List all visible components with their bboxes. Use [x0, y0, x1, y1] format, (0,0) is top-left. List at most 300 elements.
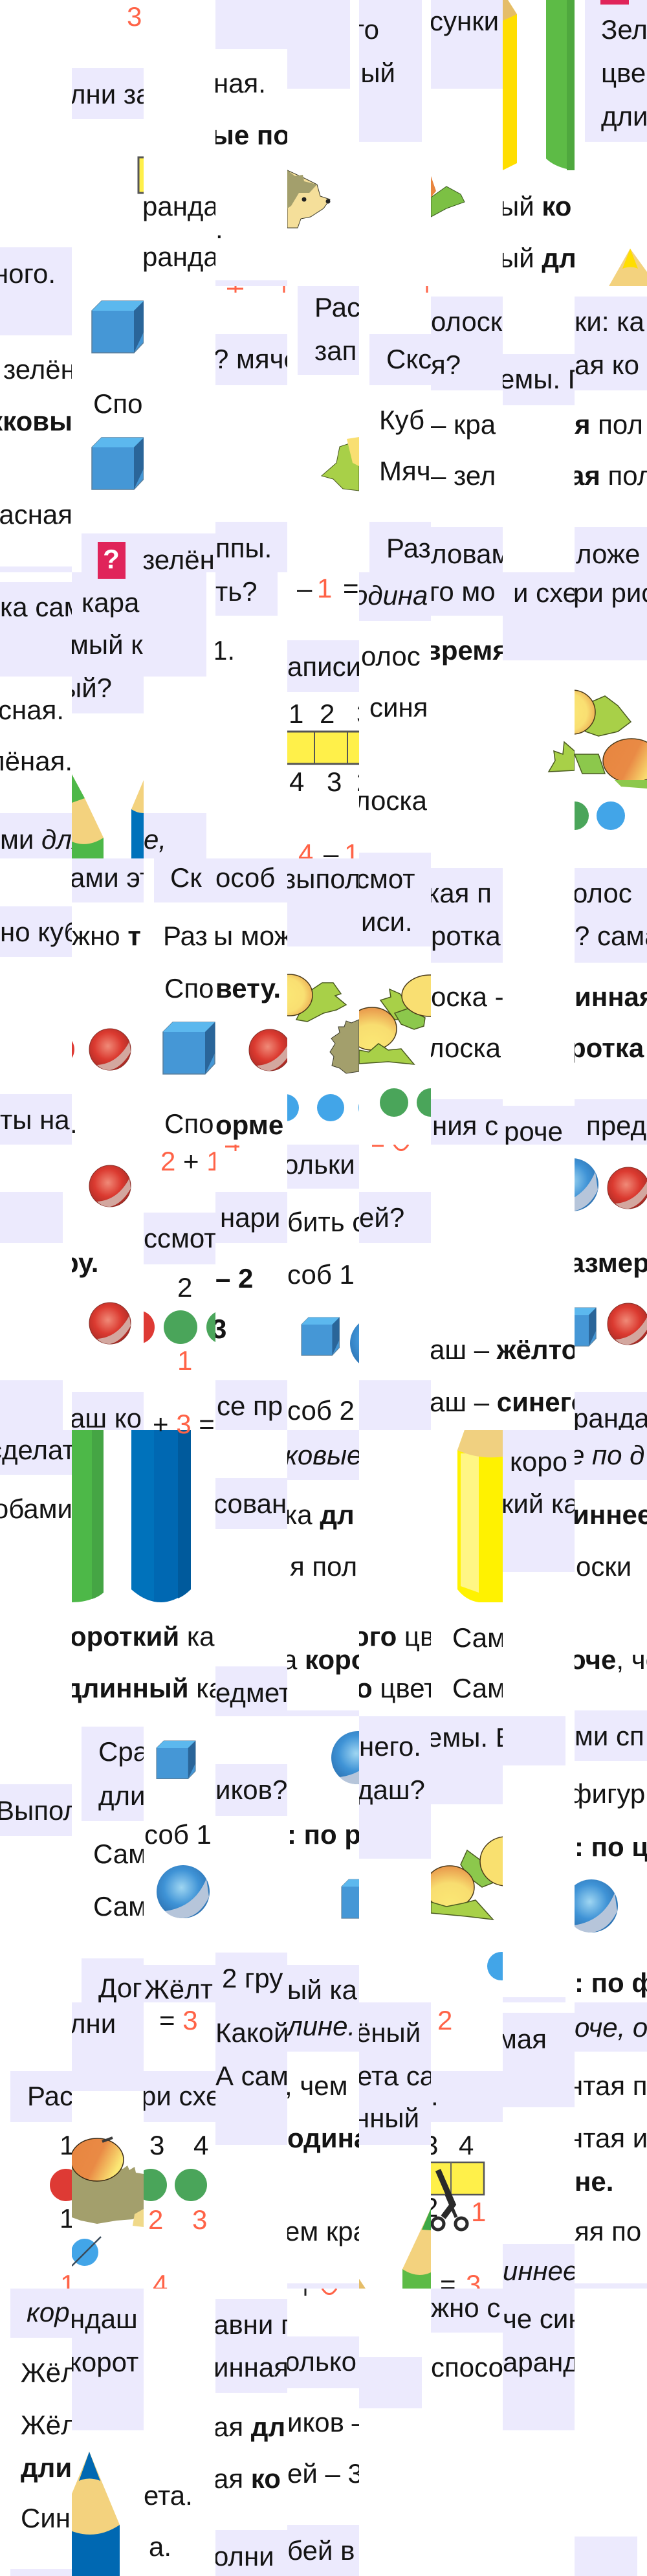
- panel: tile column 8 row 7: оче, о: [575, 2012, 647, 2043]
- panel: tile column 4 row 8: ей – 3: [287, 2458, 363, 2489]
- icon: blue dot crossed: [71, 2237, 101, 2266]
- panel: tile column 0 row 8: [10, 2289, 77, 2576]
- panel: tile column 3 row 7: Какой: [215, 2017, 289, 2048]
- panel: tile column 3 row 4: 3: [212, 1314, 226, 1344]
- panel: tile column 3 row 0: ная.: [214, 68, 266, 98]
- panel: tile column 5 row 3 with fruit: смот: [356, 864, 415, 894]
- panel: tile column 5 row 5: о цвет: [356, 1673, 436, 1703]
- panel: tile column 4 row 2: –: [324, 838, 339, 869]
- panel: tile column 7 row 6: [503, 1716, 565, 2002]
- panel: tile column 4 row 4: соб 2: [287, 1395, 355, 1426]
- panel: tile column 1 row 0: 3: [127, 1, 142, 32]
- panel: tile column 7 row 8: че син: [503, 2303, 584, 2334]
- icon: yellow pencil body: [457, 1430, 503, 1602]
- panel: tile column 5 row 0: [340, 0, 422, 142]
- panel: tile column 8 row 3: олос: [573, 878, 632, 908]
- panel: tile column 6 row 1: – кра: [431, 409, 496, 440]
- panel: tile column 8 row 4: [545, 1158, 647, 1433]
- panel: tile column 5 row 6: него.: [359, 1731, 421, 1762]
- icon: apples with leaves: [347, 975, 459, 1064]
- panel: tile column 5 row 3 with fruit: [347, 858, 459, 1117]
- panel: tile column 2 row 0: ранда: [142, 241, 219, 272]
- panel: tile column 0 row 8: кор: [27, 2297, 70, 2327]
- panel: tile column 4 row 2: 2: [320, 699, 334, 729]
- panel: tile column 0 row 8: дли: [21, 2452, 72, 2483]
- panel: tile column 4 row 2: 1: [344, 838, 359, 869]
- panel: tile column 0 row 0: [0, 247, 72, 289]
- panel: tile column 1 row 2: [62, 572, 144, 858]
- panel: tile column 4 row 5: а коро: [282, 1644, 367, 1675]
- icon: hedgehog body: [330, 1020, 359, 1073]
- panel: tile column 2 row 3: Раз: [163, 921, 208, 951]
- panel: tile column 5 row 1: Куб: [379, 405, 424, 435]
- panel: tile column 5 row 7 with green pencil tip: [355, 2002, 435, 2289]
- panel: tile column 4 row 2: 4: [298, 838, 313, 869]
- panel: tile column 1 row 4: ру.: [62, 1248, 98, 1278]
- panel: tile column 8 row 1: [569, 297, 647, 572]
- panel: tile column 4 row 5: ковые: [285, 1440, 362, 1470]
- panel: tile column 8 row 0: Зел: [601, 14, 647, 45]
- panel: tile column 2 row 4: ссмот: [144, 1223, 217, 1253]
- panel: tile column 0 row 3: но куб: [0, 917, 80, 947]
- panel: tile column 2 row 3: [154, 858, 215, 1139]
- panel: tile column 0 row 2: ка сам: [0, 592, 83, 622]
- panel: tile column 2 row 7: 4: [193, 2130, 208, 2160]
- panel: tile column 1 row 6: Сам: [93, 1891, 147, 1921]
- panel: tile column 4 row 0 with hedgehog head: [287, 0, 350, 228]
- panel: tile column 3 row 5: сован: [214, 1488, 287, 1519]
- panel: tile column 6 row 5 with yellow pencil: Сам: [452, 1622, 506, 1653]
- panel: tile column 6 row 3: [427, 868, 504, 1145]
- icon: blue ball: [331, 1731, 384, 1784]
- panel: tile column 6 row 7 with strip and scissors: 3: [466, 2269, 481, 2300]
- panel: tile column 4 row 6: ый ка: [287, 1975, 358, 2005]
- panel: tile column 6 row 3: оска -: [431, 981, 504, 1012]
- panel: tile column 4 row 8: иков –: [287, 2407, 367, 2437]
- panel: tile column 0 row 7: 1: [60, 2130, 74, 2160]
- panel: tile column 6 row 8: жно с: [431, 2292, 500, 2323]
- panel: tile column 4 row 3 with fruit and dots: зыпол: [283, 864, 360, 894]
- panel: tiles columns 6-7 row 4: аш – жёлто: [430, 1334, 578, 1365]
- panel: tile column 2 row 3: Спо: [164, 1108, 214, 1139]
- panel: tile column 8 row 7: [568, 2002, 647, 2289]
- panel: tile column 2 row 3: Ск: [170, 862, 202, 893]
- icon: leaf: [431, 186, 465, 217]
- panel: tile column 8 row 7: не.: [575, 2166, 613, 2197]
- panel: tile column 5 row 2: лоска: [355, 785, 428, 816]
- panel: tile column 1 row 1: [82, 300, 144, 574]
- panel: tile column 0 row 1: зелён: [3, 354, 76, 385]
- panel: tile column 1 row 8 with blue pencil: [69, 2289, 144, 2576]
- icon: cube: [157, 1741, 195, 1778]
- panel: tile column 3 row 5: едмет: [215, 1677, 291, 1708]
- panel: tile column 6 row 2: время: [424, 635, 509, 666]
- panel: tile column 7 row 7: мая: [498, 2024, 547, 2054]
- panel: tile column 2 row 8: [144, 2480, 193, 2562]
- icon: yellow pencil body: [503, 0, 517, 170]
- icon: cube: [92, 301, 144, 353]
- icon: green pencil body: [546, 0, 575, 170]
- icon: yellow numbered strip: [285, 732, 362, 764]
- panel: tile column 6 row 6 with apples: [425, 1716, 532, 1980]
- panel: tile column 2 row 6: [144, 1740, 215, 2004]
- panel: tile column 0 row 8: Жёл: [21, 2410, 77, 2440]
- panel: tile column 3 row 2: [212, 572, 278, 666]
- panel: tile column 4 row 2: 3: [356, 699, 371, 729]
- panel: tile column 7 row 1: емы. Г: [499, 364, 583, 394]
- panel: tile column 8 row 8: [575, 2537, 637, 2576]
- panel: tile column 6 row 1: – зел: [431, 460, 496, 491]
- panel: tile column 4 row 2: 4: [289, 767, 304, 797]
- panel: tile column 2 row 2: [144, 572, 206, 858]
- panel: tile column 4 row 5: я пол: [290, 1551, 357, 1582]
- panel: tile column 8 row 3: ротка: [569, 1033, 644, 1063]
- panel: tile column 3 row 6: [215, 1764, 287, 2002]
- panel: tile column 7 row 5: кий ка: [501, 1488, 579, 1519]
- panel: tile column 2 row 2: е,: [144, 824, 166, 855]
- panel: tile column 8 row 6: фигур: [569, 1778, 645, 1809]
- panel: tile column 3 row 8: инная: [214, 2352, 289, 2382]
- panel: tile column 6 row 1: я?: [431, 350, 461, 380]
- panel: tile column 7 row 8: аранд: [503, 2347, 579, 2377]
- icon: blue pencil tip: [59, 2452, 120, 2576]
- panel: tile column 4 row 2: –: [297, 573, 313, 603]
- panel: tile column 0 row 6: [0, 1784, 79, 1836]
- panel: tile column 3 row 4: се пр: [217, 1391, 283, 1421]
- panel: tile column 6 row 7 with strip and scissors: =: [440, 2269, 456, 2300]
- panel: tile column 7 row 3: роче: [504, 1116, 563, 1147]
- panel: tile column 8 row 0: дли: [601, 101, 647, 131]
- icon: green pencil tip: [359, 2208, 431, 2289]
- panel: tile column 3 row 1: [214, 286, 299, 572]
- panel: tile column 8 row 1: я пол: [574, 409, 643, 440]
- panel: tile column 3 row 8: ая ко: [214, 2463, 281, 2494]
- panel: tile column 1 row 7 with hedgehog: лни: [70, 2008, 116, 2039]
- panel: tile column 8 row 5: е по д: [569, 1440, 644, 1470]
- panel: tile column 5 row 1: Раз: [386, 533, 431, 563]
- panel: tile column 0 row 7: Рас: [27, 2081, 73, 2111]
- panel: tile column 1 row 6: Дог: [98, 1973, 142, 2003]
- panel: tile column 4 row 7: , чем: [285, 2070, 347, 2101]
- panel: tile column 2 row 4: 2 + 1: [160, 1146, 222, 1176]
- panel: tile column 1 row 3: жно т: [72, 921, 141, 951]
- panel: tile column 0 row 7: 1: [60, 2203, 74, 2234]
- panel: tile column 5 row 7 with green pencil tip: ёный: [356, 2017, 421, 2048]
- panel: tile column 3 row 4: [212, 1145, 287, 1430]
- icon: apples with leaves: [425, 1837, 532, 1920]
- panel: tile column 2 row 7: = 3: [159, 2005, 198, 2035]
- panel: tile column 6 row 8: [431, 2289, 503, 2382]
- panel: tile column 4 row 5: [282, 1430, 367, 1716]
- panel: tile column 6 row 5 with yellow pencil: [452, 1430, 506, 1703]
- panel: tile column 5 row 2: олос: [361, 641, 421, 671]
- panel: tile column 6 row 3: ротка: [431, 921, 501, 951]
- panel: tile column 2 row 7: 3: [149, 2130, 164, 2160]
- panel: tile column 5 row 1: Мяч: [379, 456, 431, 486]
- panel: tile column 6 row 3: ния с: [432, 1110, 498, 1141]
- icon: scissors: [432, 2170, 467, 2230]
- panel: tile column 1 row 2: ый?: [62, 673, 112, 703]
- panel: tile column 0 row 3: ты на: [0, 1104, 70, 1135]
- panel: tile column 7 row 3: [503, 1106, 575, 1147]
- panel: tile column 3 row 7: А сам: [215, 2061, 289, 2091]
- icon: green pencil body: [72, 1430, 104, 1602]
- icon: yellow pencil tip: [609, 249, 647, 286]
- panel: tile column 2 row 0: [142, 191, 219, 272]
- panel: tile column 5 row 8: [359, 2357, 422, 2408]
- panel: tile column 6 row 7 with strip and scissors: 2: [437, 2005, 452, 2035]
- panel: tile column 1 row 7 with hedgehog: [70, 2002, 144, 2267]
- panel: tile column 1 row 4: [62, 1165, 144, 1433]
- panel: tile column 4 row 2: 2: [356, 767, 371, 797]
- panel: tile column 4 row 2: [287, 573, 371, 869]
- panel: tile column 8 row 7: нтая и: [568, 2123, 647, 2153]
- icon: hedgehog head: [287, 170, 330, 228]
- panel: tile column 3 row 8: олни: [214, 2541, 274, 2571]
- panel: tile column 5 row 7 with green pencil tip: нный: [355, 2103, 419, 2133]
- panel: tiles columns 1-2 row 5 with pencils: ороткий ка: [70, 1621, 215, 1652]
- panel: tile column 4 row 2: 1: [317, 573, 332, 603]
- panel: tile column 0 row 7: 1: [60, 2269, 75, 2300]
- panel: tile column 8 row 1: ая ко: [575, 350, 639, 380]
- panel: tiles columns 1-2 row 5 with pencils: [65, 1409, 225, 1703]
- panel: tile column 7 row 2: и схе: [513, 577, 578, 608]
- panel: tile column 2 row 6: соб 1: [144, 1819, 212, 1850]
- icon: cube: [558, 1308, 596, 1346]
- panel: tile column 2 row 6: Жёлт: [144, 1974, 213, 2004]
- panel: tile column 6 row 2: го мо: [430, 576, 496, 607]
- panel: tile column 0 row 1: [0, 286, 76, 572]
- panel: tile column 2 row 7: 3: [192, 2204, 207, 2235]
- panel: tile column 4 row 3 with fruit and dots: [283, 858, 360, 1121]
- panel: tile column 2 row 4: + 3 =: [153, 1409, 215, 1439]
- panel: tile column 6 row 7 with strip and scissors: 2: [423, 2192, 438, 2223]
- panel: tile column 8 row 3: [569, 868, 647, 1145]
- panel: tile column 5 row 2: одина: [353, 580, 428, 610]
- panel: tile column 1 row 8 with blue pencil: ндаш: [70, 2303, 138, 2334]
- panel: tile column 3 row 3: [214, 858, 292, 1140]
- panel: tile column 3 row 3: особ: [215, 862, 275, 893]
- panel: tile column 2 row 4: 2: [177, 1272, 192, 1303]
- panel: tile column 4 row 4: соб 1: [287, 1259, 355, 1290]
- panel: tile column 2 row 7: 2: [148, 2204, 163, 2235]
- panel: tile column 2 row 7: ри схе: [141, 2081, 221, 2111]
- panel: tile column 4 row 2: 1: [289, 699, 303, 729]
- panel: tile column 7 row 5: коро: [510, 1446, 567, 1477]
- panel: tile column 1 row 6: Сра: [98, 1736, 149, 1767]
- panel: tile column 1 row 1: ?: [103, 544, 120, 574]
- panel: tile column 4 row 4: [283, 1145, 366, 1426]
- panel: tiles columns 6-7 row 4: аш – синего: [430, 1387, 587, 1417]
- panel: tile column 6 row 1: [431, 297, 510, 572]
- panel: tile column 6 row 6 with apples: емы. В: [427, 1722, 514, 1753]
- icon: apples with leaves: [550, 690, 647, 789]
- panel: tile column 3 row 6: иков?: [215, 1775, 287, 1805]
- panel: tile column 3 row 0: ые по: [211, 120, 290, 150]
- panel: tile column 4 row 1: Рас: [314, 292, 360, 322]
- panel: tile column 1 row 3: [70, 858, 152, 1139]
- panel: tile column 5 row 1: Скс: [386, 344, 432, 374]
- panel: tile column 6 row 7 with strip and scissors: 1: [471, 2197, 486, 2227]
- panel: tile column 1 row 1: Спо: [93, 388, 142, 419]
- panel: tile column 5 row 2: синя: [369, 692, 428, 722]
- icon: red ball: [608, 1167, 647, 1209]
- panel: tile column 3 row 2: ть?: [215, 576, 257, 607]
- panel: tile column 0 row 4: [0, 1192, 63, 1430]
- panel: tile column 2 row 7: [141, 2005, 221, 2300]
- icon: cube: [302, 1317, 339, 1355]
- panel: tile column 8 row 2 with apples: [550, 572, 647, 830]
- panel: tile column 6 row 0: сунки: [430, 6, 499, 36]
- panel: tile column 4 row 7: лине.: [285, 2011, 355, 2041]
- panel: tile column 8 row 0: [585, 0, 647, 286]
- panel: tile column 7 row 0 with pencils: ый ко: [499, 191, 571, 221]
- panel: tile column 7 row 2: [503, 572, 578, 772]
- panel: tile column 3 row 3: вету.: [215, 973, 281, 1003]
- icon: red ball: [249, 1029, 291, 1071]
- panel: tile column 6 row 3: кая п: [427, 878, 492, 908]
- icon: blue ball: [545, 1158, 598, 1211]
- panel: tile column 2 row 1: зелён: [142, 544, 215, 575]
- icon: red ball: [608, 1303, 647, 1345]
- panel: tile column 4 row 8: олько: [285, 2346, 356, 2377]
- panel: tile column 2 row 8: а.: [149, 2531, 171, 2562]
- panel: tile column 6 row 2: [424, 572, 509, 666]
- panel: tile column 0 row 5: [0, 1430, 75, 1524]
- panel: tile column 6 row 1: ловам: [431, 539, 510, 569]
- panel: tile column 3 row 3: орме: [215, 1110, 283, 1140]
- panel: tile column 2 row 4: [144, 1146, 222, 1439]
- panel: tile column 0 row 2: сная.: [0, 695, 64, 725]
- panel: tile column 4 row 8: бей в: [287, 2535, 355, 2566]
- panel: tile column 3 row 4: – 2: [215, 1263, 253, 1294]
- panel: tile column 7 row 0 with pencils: ый дл: [499, 243, 576, 273]
- panel: tile column 5 row 5: [353, 1621, 436, 1703]
- icon: cube: [163, 1022, 215, 1074]
- panel: tiles columns 1-2 row 5 with pencils: длинный ка: [65, 1673, 225, 1703]
- panel: tile column 4 row 6: [287, 1731, 384, 2005]
- panel: tile column 8 row 7: яя по: [575, 2216, 641, 2246]
- panel: tile column 7 row 5: [501, 1430, 579, 1572]
- panel: tile column 5 row 4: [359, 1145, 431, 1430]
- icon: blue ball: [350, 1317, 403, 1370]
- panel: tile column 3 row 8: ая дл: [214, 2412, 285, 2442]
- panel: tile column 5 row 0: ый: [360, 58, 395, 88]
- panel: tile column 3 row 6: 2 гру: [222, 1963, 283, 1993]
- panel: tile column 8 row 6: [565, 1716, 647, 1998]
- panel: tile column 7 row 8: [503, 2289, 584, 2430]
- panel: tile column 8 row 1: ки: ка: [575, 306, 644, 337]
- panel: tile column 5 row 6: [357, 1716, 451, 1859]
- panel: tile column 4 row 2: аписи: [287, 651, 361, 682]
- panel: tile column 3 row 5: [214, 1478, 291, 1716]
- icon: blue ball: [565, 1879, 618, 1932]
- panel: tile column 1 row 3: ами эт: [70, 862, 152, 893]
- panel: tile column 6 row 3: лоска: [428, 1033, 501, 1063]
- panel: tile column 5 row 3 with fruit: иси.: [361, 906, 413, 937]
- panel: tile column 0 row 8: Син: [21, 2503, 71, 2533]
- panel: tile column 7 row 7: [498, 2013, 578, 2289]
- panel: tile column 8 row 7: нтая п: [568, 2070, 647, 2101]
- panel: tile column 5 row 2: [353, 572, 431, 858]
- panel: tile column 3 row 2: 1.: [212, 635, 235, 666]
- panel: tile column 8 row 6: ми сп: [575, 1721, 644, 1751]
- panel: tile column 3 row 7: [215, 2002, 289, 2145]
- panel: tile column 0 row 2: ми для: [0, 824, 86, 855]
- panel: tile column 4 row 7: одина: [287, 2123, 369, 2153]
- panel: tile column 6 row 1: олоск: [431, 306, 503, 337]
- panel: tile column 2 row 4: 1: [177, 1345, 192, 1376]
- panel: tiles columns 1-2 row 5 with pencils: + 3 =: [153, 1409, 215, 1439]
- icon: leaf: [549, 742, 575, 772]
- panel: tile column 7 row 7: иннее: [503, 2256, 578, 2286]
- panel: tile column 6 row 7 with strip and scissors: 3: [423, 2130, 438, 2160]
- panel: tile column 1 row 4: аш ко: [70, 1403, 142, 1433]
- panel: tile column 6 row 0: [430, 0, 503, 217]
- icon: blue ball: [157, 1865, 210, 1918]
- panel: tile column 2 row 7: 4: [153, 2269, 168, 2300]
- panel: tile column 5 row 7 with green pencil tip: ета са: [357, 2061, 435, 2091]
- panel: tile column 6 row 7 with strip and scissors: [423, 2005, 503, 2300]
- panel: tile column 3 row 0: .: [215, 214, 223, 244]
- panel: tile column 8 row 6: : по ц: [575, 1831, 647, 1862]
- icon: yellow apple with leaf: [266, 974, 346, 1022]
- panel: tile column 5 row 4: ей?: [359, 1202, 404, 1233]
- panel: tile column 3 row 8: авни г: [214, 2309, 291, 2340]
- panel: tile column 3 row 1: ? мяче: [214, 344, 299, 374]
- panel: tile column 7 row 0 with pencils: [499, 0, 576, 273]
- panel: tile column 6 row 8: спосо: [431, 2352, 503, 2382]
- panel: tile column 5 row 0: ого: [340, 14, 379, 45]
- panel: tile column 1 row 6: [82, 1727, 149, 2003]
- panel: tile column 4 row 7: [285, 2002, 369, 2289]
- panel: tile column 0 row 8: Жёл: [21, 2357, 77, 2388]
- panel: tile column 3 row 8: [214, 2299, 291, 2576]
- panel: tile column 0 row 2: [0, 582, 86, 858]
- panel: tile column 6 row 7 with strip and scissors: 4: [459, 2130, 474, 2160]
- panel: tile column 5 row 1: [369, 286, 432, 572]
- panel: tile column 8 row 5: оски: [576, 1551, 631, 1582]
- panel: tile column 5 row 6: даш? А: [357, 1775, 451, 1805]
- panel: tile column 1 row 0: лни за: [70, 79, 151, 109]
- panel: tile column 5 row 5: ого цв: [353, 1621, 434, 1652]
- panel: tile column 8 row 1: ложе: [576, 539, 640, 569]
- panel: tile column 1 row 3: .: [70, 1108, 78, 1139]
- panel: tile column 4 row 6: : по ра: [287, 1819, 377, 1850]
- panel: tile column 1 row 6: Сам: [93, 1839, 147, 1869]
- panel: tile column 4 row 8: [285, 2289, 367, 2576]
- panel: tile column 0 row 7: [10, 2071, 75, 2300]
- panel: tile column 0 row 3: [0, 906, 80, 1145]
- panel: tile column 3 row 0: [211, 0, 290, 286]
- icon: leaf and apple: [322, 437, 359, 491]
- panel: tile column 2 row 8: ета.: [144, 2480, 193, 2511]
- icon: cube: [342, 1879, 380, 1918]
- panel: tile column 8 row 3: пред: [586, 1110, 646, 1141]
- panel: tile column 7 row 1: [499, 354, 583, 405]
- panel: tile column 4 row 1: [298, 286, 360, 491]
- panel: tile column 4 row 4: ольки: [283, 1149, 355, 1180]
- panel: tile column 6 row 7 with strip and scissors: .: [431, 2081, 439, 2111]
- panel: tile column 4 row 7: ем кра: [285, 2216, 369, 2246]
- panel: tile column 3 row 4: нари: [220, 1202, 280, 1233]
- panel: tile column 2 row 0: ранда: [142, 191, 219, 221]
- panel: tile column 2 row 3: Спо: [164, 973, 214, 1003]
- icon: cube: [92, 438, 144, 489]
- panel: tile column 1 row 8 with blue pencil: корот: [69, 2347, 138, 2377]
- panel: tile column 4 row 1: зап: [314, 335, 356, 366]
- icon: hedgehog with apple: [71, 2138, 144, 2227]
